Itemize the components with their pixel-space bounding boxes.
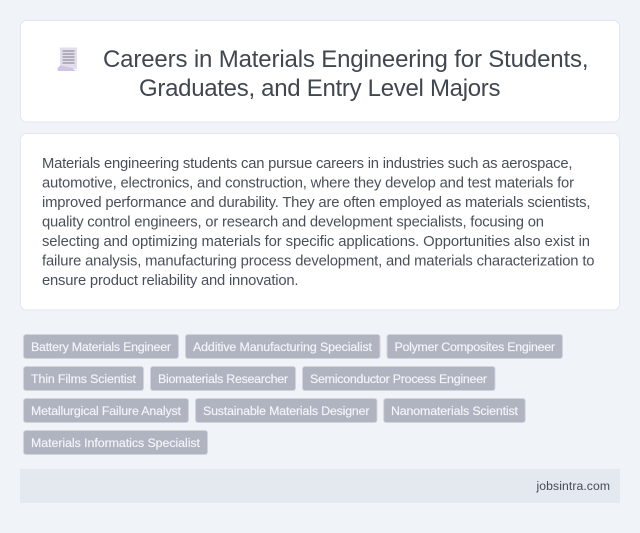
title <box>103 46 588 102</box>
description text <box>42 156 594 289</box>
tag: Biomaterials Researcher: Biomaterials Researcher <box>158 372 288 386</box>
title: Careers in Materials Engineering for Students, <box>103 46 588 73</box>
tag: Semiconductor Process Engineer: Semiconductor Process Engineer <box>310 372 487 386</box>
panel: description <box>20 134 620 310</box>
tag: Semiconductor Process Engineer <box>302 366 495 390</box>
tag: Nanomaterials Scientist: Nanomaterials Scientist <box>391 404 519 418</box>
footer <box>20 469 620 503</box>
title: Graduates, and Entry Level Majors <box>139 75 500 102</box>
tag: Battery Materials Engineer: Battery Materials Engineer <box>31 340 171 354</box>
tag: Additive Manufacturing Specialist <box>186 334 380 358</box>
tag: Polymer Composites Engineer: Polymer Composites Engineer <box>394 340 555 354</box>
description text: quality control engineers, or research and development specialists, focusing on <box>42 214 544 230</box>
tag: Polymer Composites Engineer <box>387 334 562 358</box>
description text: improved performance and durability. They are often employed as materials scientists, <box>42 195 590 211</box>
tag list <box>24 334 562 454</box>
tag: Additive Manufacturing Specialist: Additive Manufacturing Specialist <box>193 340 373 354</box>
panel: header <box>20 20 620 122</box>
tag: Materials Informatics Specialist: Materials Informatics Specialist <box>31 436 201 450</box>
icon: document scroll <box>57 48 77 71</box>
description text: automotive, electronics, and construction, where they develop and test materials for <box>42 176 574 192</box>
tag: Metallurgical Failure Analyst: Metallurgical Failure Analyst <box>31 404 182 418</box>
tag: Biomaterials Researcher <box>150 366 296 390</box>
footer site name: jobsintra.com <box>536 479 610 493</box>
description text: ensure product reliability and innovation. <box>42 273 298 289</box>
tag: Sustainable Materials Designer <box>196 398 377 422</box>
description text: selecting and optimizing materials for specific applications. Opportunities also exist in <box>42 234 590 250</box>
tag: Sustainable Materials Designer: Sustainable Materials Designer <box>203 404 370 418</box>
tag: Metallurgical Failure Analyst <box>24 398 188 422</box>
tag: Materials Informatics Specialist <box>24 430 208 454</box>
tag: Thin Films Scientist <box>24 366 144 390</box>
tag: Nanomaterials Scientist <box>384 398 525 422</box>
description text: Materials engineering students can pursue careers in industries such as aerospace, <box>42 156 572 172</box>
tag: Battery Materials Engineer <box>24 334 178 358</box>
description text: failure analysis, manufacturing process development, and materials characterization to <box>42 254 594 270</box>
tag: Thin Films Scientist: Thin Films Scientist <box>31 372 137 386</box>
